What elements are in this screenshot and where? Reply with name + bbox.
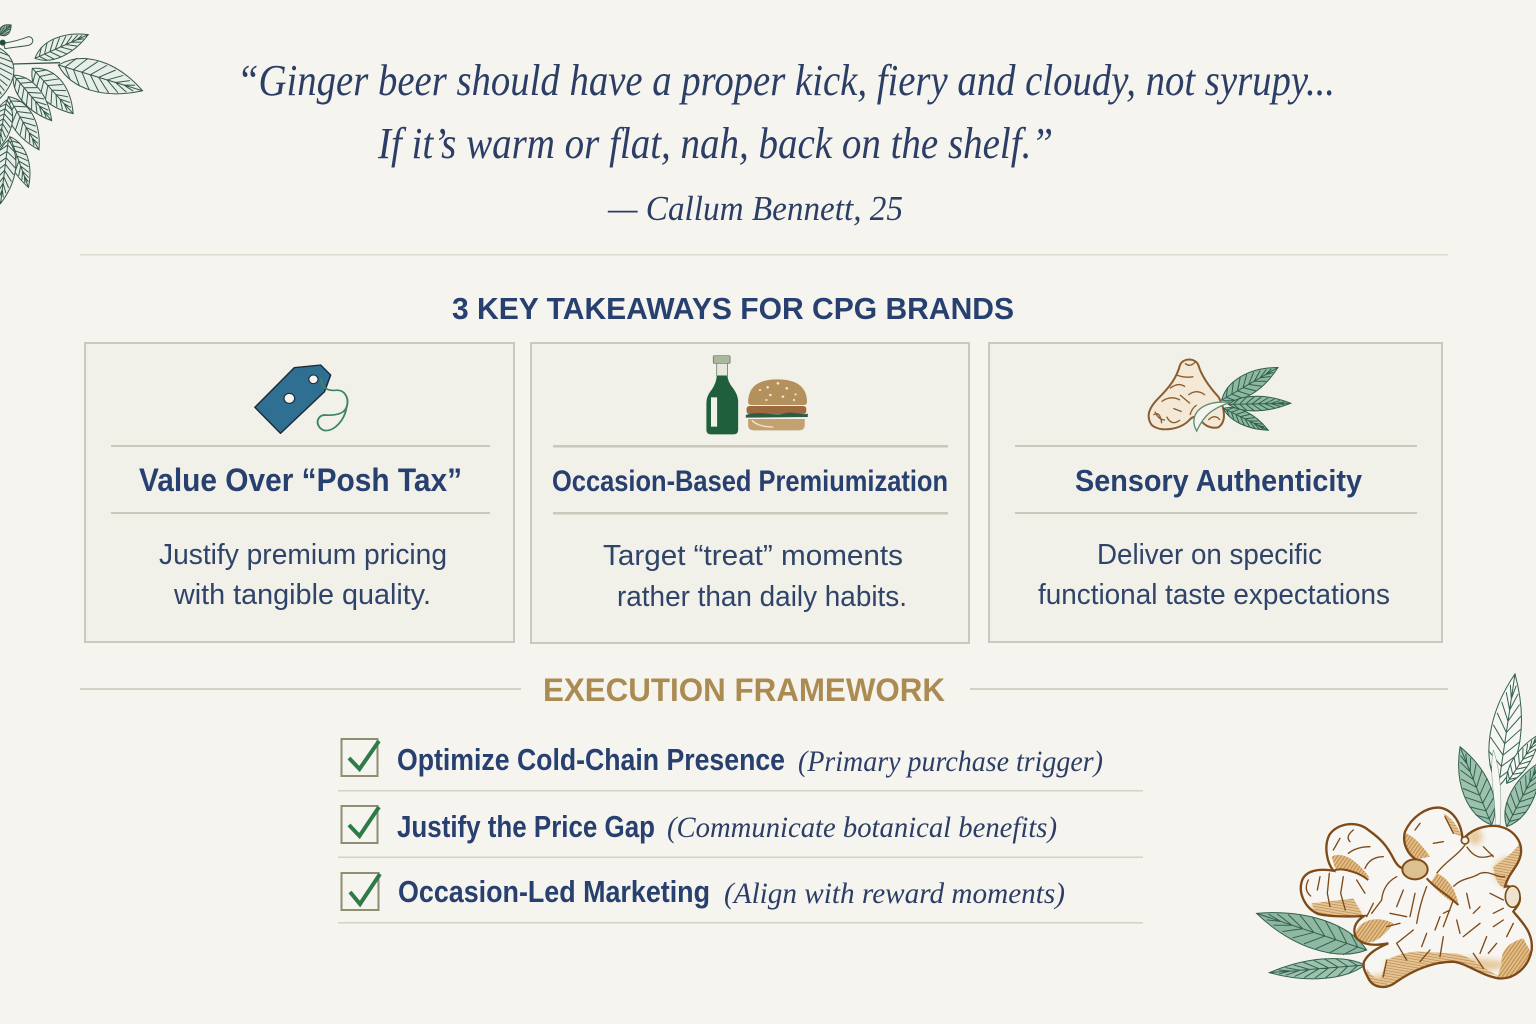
panel: sensory authenticity [989, 343, 1442, 642]
icon: price tag [255, 365, 347, 433]
card body: Deliver on specific [1097, 539, 1322, 571]
checklist item: occasion-led: (Align with reward moments) [724, 877, 1065, 910]
quote attribution: — Callum Bennett, 25 [607, 189, 903, 228]
leaves behind ginger [1252, 672, 1536, 983]
checklist item: cold-chain: Optimize Cold-Chain Presence [397, 742, 785, 777]
card body: Target “treat” moments [603, 540, 903, 572]
checklist item: occasion-led: Occasion-Led Marketing [398, 874, 710, 909]
checklist [338, 739, 1143, 924]
illustration: ginger root with leaves [1252, 672, 1536, 992]
checklist item: price gap [342, 806, 1057, 844]
card title: Occasion-Based Premiumization [552, 465, 948, 498]
icon: ginger and leaves [1149, 358, 1291, 436]
card body [1038, 539, 1390, 611]
quote [237, 56, 1335, 168]
checklist item: cold-chain: (Primary purchase trigger) [798, 745, 1103, 778]
ginger body [1300, 808, 1535, 992]
heading: key takeaways: 3 KEY TAKEAWAYS FOR CPG BRANDS [452, 291, 1014, 326]
card body: rather than daily habits. [617, 581, 907, 613]
checklist item: occasion-led [342, 873, 1065, 910]
card body [159, 539, 447, 611]
botanical leaves top left [0, 21, 147, 205]
card body: functional taste expectations [1038, 579, 1390, 611]
checklist item: price gap: Justify the Price Gap [397, 809, 655, 844]
quote: If it’s warm or flat, nah, back on the shelf.” [377, 119, 1053, 168]
checklist item: price gap: (Communicate botanical benefits) [667, 811, 1057, 844]
card body: Justify premium pricing [159, 539, 447, 571]
panel: value over posh tax [85, 343, 514, 642]
heading: execution framework: EXECUTION FRAMEWORK [543, 672, 945, 708]
card body: with tangible quality. [173, 579, 431, 611]
checklist item: cold-chain [342, 739, 1103, 778]
icon: bottle and burger [706, 356, 808, 434]
card body [603, 540, 907, 613]
panel: occasion-based premiumization [531, 343, 969, 643]
card title: Sensory Authenticity [1075, 463, 1363, 498]
quote: “Ginger beer should have a proper kick, fiery and cloudy, not syrupy... [237, 56, 1335, 105]
card title: Value Over “Posh Tax” [139, 462, 462, 498]
